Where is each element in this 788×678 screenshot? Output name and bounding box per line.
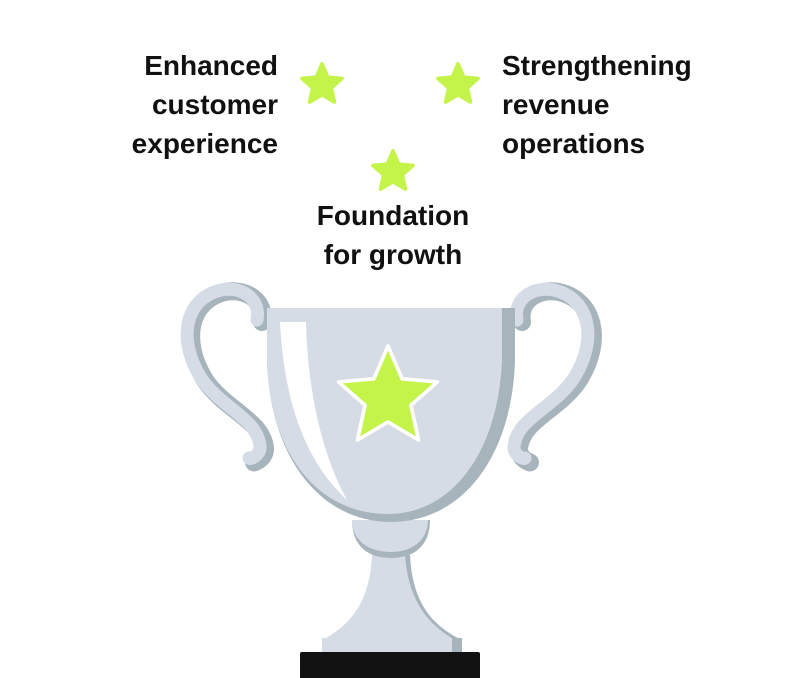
icon: star center [373, 151, 413, 189]
text: strengthening revenue operations: Strengthening [502, 50, 692, 81]
cup [267, 308, 515, 522]
text: enhanced customer experience [132, 50, 278, 159]
text: enhanced customer experience: experience [132, 128, 278, 159]
right handle [519, 291, 593, 462]
text: strengthening revenue operations: operations [502, 128, 645, 159]
icon: star right [438, 64, 478, 102]
icon: star left [302, 64, 342, 102]
text: strengthening revenue operations [502, 50, 692, 159]
text: strengthening revenue operations: revenue [502, 89, 609, 120]
base [300, 652, 480, 678]
text: enhanced customer experience: customer [152, 89, 278, 120]
text: foundation for growth: Foundation [317, 200, 469, 231]
neck [352, 520, 430, 558]
trophy [187, 289, 593, 678]
left handle [191, 291, 265, 462]
text: foundation for growth: for growth [324, 239, 462, 270]
text: enhanced customer experience: Enhanced [144, 50, 278, 81]
stem [322, 555, 462, 640]
icon: trophy star [339, 346, 437, 440]
text: foundation for growth [317, 200, 469, 270]
step [322, 638, 462, 652]
